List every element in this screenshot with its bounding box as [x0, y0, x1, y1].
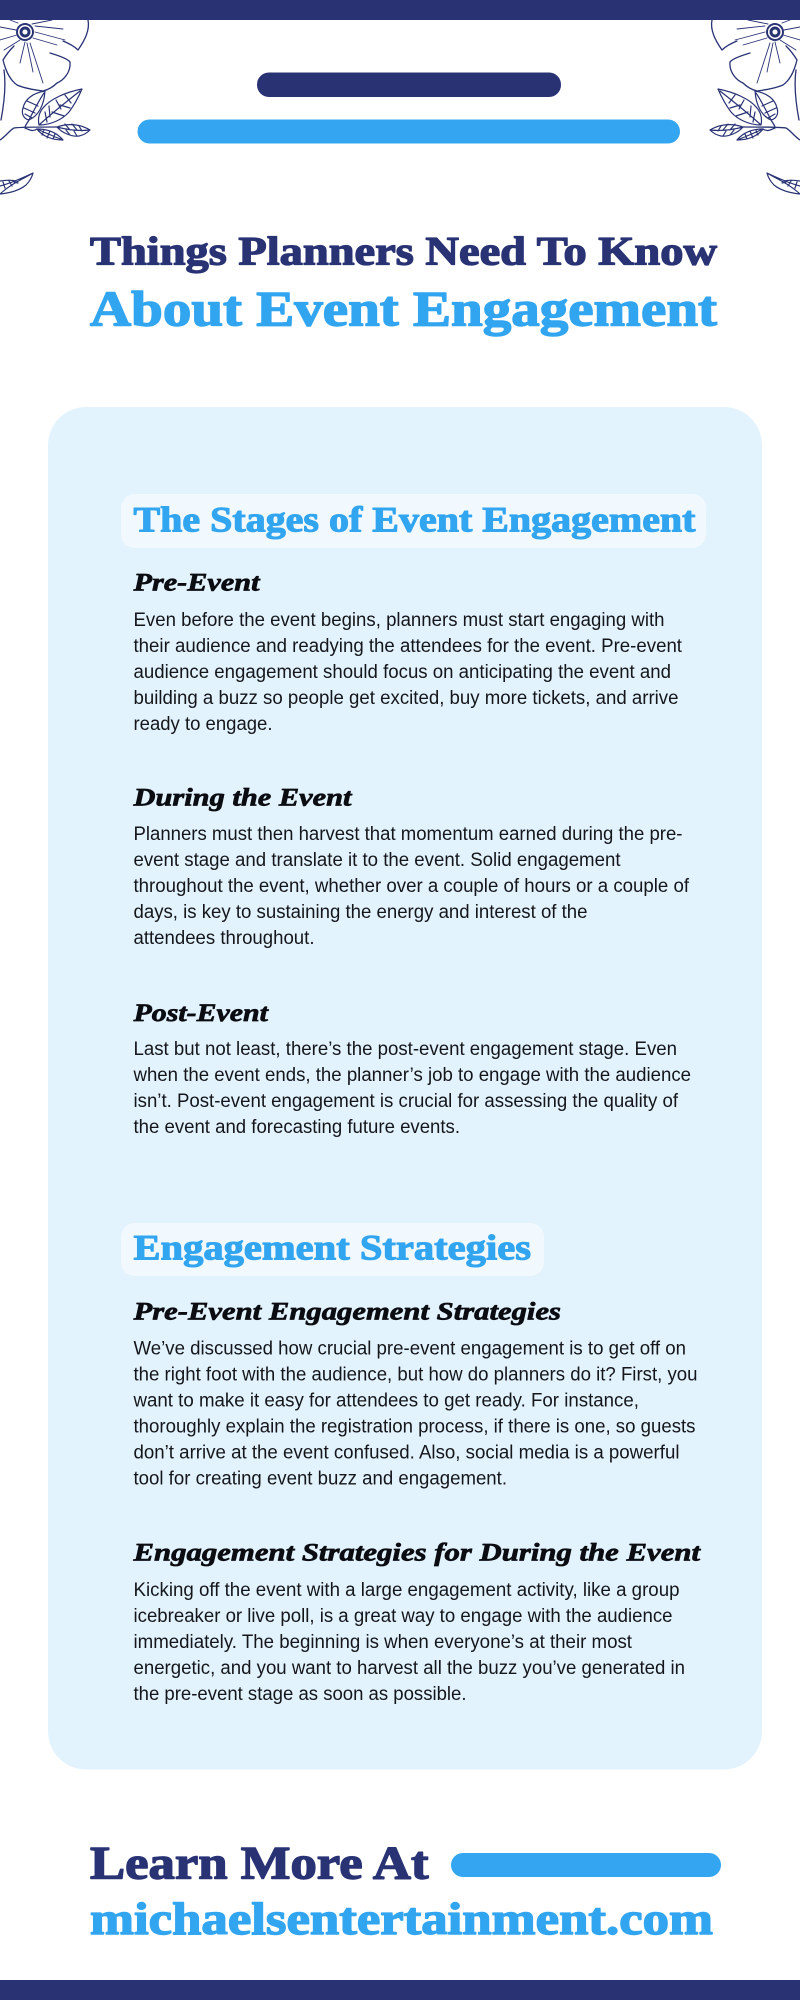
decorative navy pill: [257, 72, 561, 97]
block: during the event: Planners must then harvest that momentum earned during the pre-: [134, 823, 682, 845]
decorative blue pill: [138, 120, 680, 144]
block: pre-event engagement strategies: [132, 1298, 698, 1490]
title: [90, 228, 718, 336]
block: pre-event: [132, 570, 683, 735]
block: engagement strategies for during the event: [132, 1540, 701, 1705]
section: the stages of event engagement: [121, 494, 706, 1138]
block: engagement strategies for during the event: icebreaker or live poll, is a great way to engage with the audience: [134, 1605, 673, 1627]
website address: michaelsentertainment.com: [90, 1894, 713, 1944]
panel: main content: [48, 407, 762, 1770]
block: post-event: isn’t. Post-event engagement is crucial for assessing the quality of: [134, 1090, 679, 1112]
block: during the event: throughout the event, whether over a couple of hours or a couple of: [134, 875, 690, 897]
block: engagement strategies for during the event: immediately. The beginning is when everyone’s at their most: [134, 1631, 633, 1653]
floral corner: top left: [0, 20, 90, 194]
block: during the event: days, is key to sustaining the energy and interest of the: [134, 901, 588, 923]
block: during the event: event stage and translate it to the event. Solid engagement: [134, 849, 621, 871]
heading pill: stages: [121, 494, 706, 548]
block: pre-event engagement strategies: tool for creating event buzz and engagement.: [134, 1468, 507, 1490]
block: during the event: During the Event: [132, 784, 353, 812]
section: engagement strategies: [121, 1223, 701, 1705]
floral corner: top right: [710, 20, 800, 194]
title: Things Planners Need To Know: [90, 228, 718, 274]
block: pre-event engagement strategies: We’ve discussed how crucial pre-event engagement is to get off on: [134, 1338, 686, 1360]
block: pre-event: audience engagement should focus on anticipating the event and: [134, 661, 671, 683]
block: engagement strategies for during the event: the pre-event stage as soon as possible.: [134, 1683, 466, 1705]
call to action: learn more: [90, 1838, 721, 1890]
decorative blue pill: footer: [451, 1853, 721, 1877]
block: pre-event: building a buzz so people get excited, buy more tickets, and arrive: [134, 687, 679, 709]
top navy band: [0, 0, 800, 20]
block: pre-event engagement strategies: Pre-Event Engagement Strategies: [132, 1298, 561, 1326]
call to action: learn more: Learn More At: [90, 1838, 429, 1890]
block: engagement strategies for during the event: energetic, and you want to harvest all the buzz you’ve generated in: [134, 1657, 685, 1679]
block: pre-event: Pre-Event: [132, 570, 261, 596]
title: About Event Engagement: [90, 280, 717, 336]
heading pill: stages: The Stages of Event Engagement: [134, 500, 696, 540]
heading pill: strategies: [121, 1223, 544, 1276]
block: pre-event: Even before the event begins, planners must start engaging with: [134, 609, 664, 631]
block: pre-event engagement strategies: don’t arrive at the event confused. Also, social media is a powerful: [134, 1442, 680, 1464]
block: pre-event: their audience and readying the attendees for the event. Pre-event: [134, 635, 683, 657]
block: pre-event engagement strategies: want to make it easy for attendees to get ready. For instance,: [133, 1390, 639, 1412]
block: during the event: [132, 784, 690, 949]
block: engagement strategies for during the event: Kicking off the event with a large engagement activity, like a group: [134, 1579, 680, 1601]
block: post-event: Last but not least, there’s the post-event engagement stage. Even: [134, 1038, 677, 1060]
block: pre-event: ready to engage.: [134, 713, 272, 735]
block: post-event: when the event ends, the planner’s job to engage with the audience: [133, 1064, 691, 1086]
block: pre-event engagement strategies: the right foot with the audience, but how do planners do it? First, you: [134, 1364, 698, 1386]
block: post-event: Post-Event: [132, 1000, 269, 1027]
heading pill: strategies: Engagement Strategies: [134, 1228, 531, 1268]
block: during the event: attendees throughout.: [134, 927, 314, 949]
block: post-event: [132, 1000, 691, 1138]
block: engagement strategies for during the event: Engagement Strategies for During the Event: [132, 1540, 701, 1566]
block: pre-event engagement strategies: thoroughly explain the registration process, if there is one, so guests: [134, 1416, 696, 1438]
block: post-event: the event and forecasting future events.: [134, 1116, 460, 1138]
bottom navy band: [0, 1980, 800, 2000]
